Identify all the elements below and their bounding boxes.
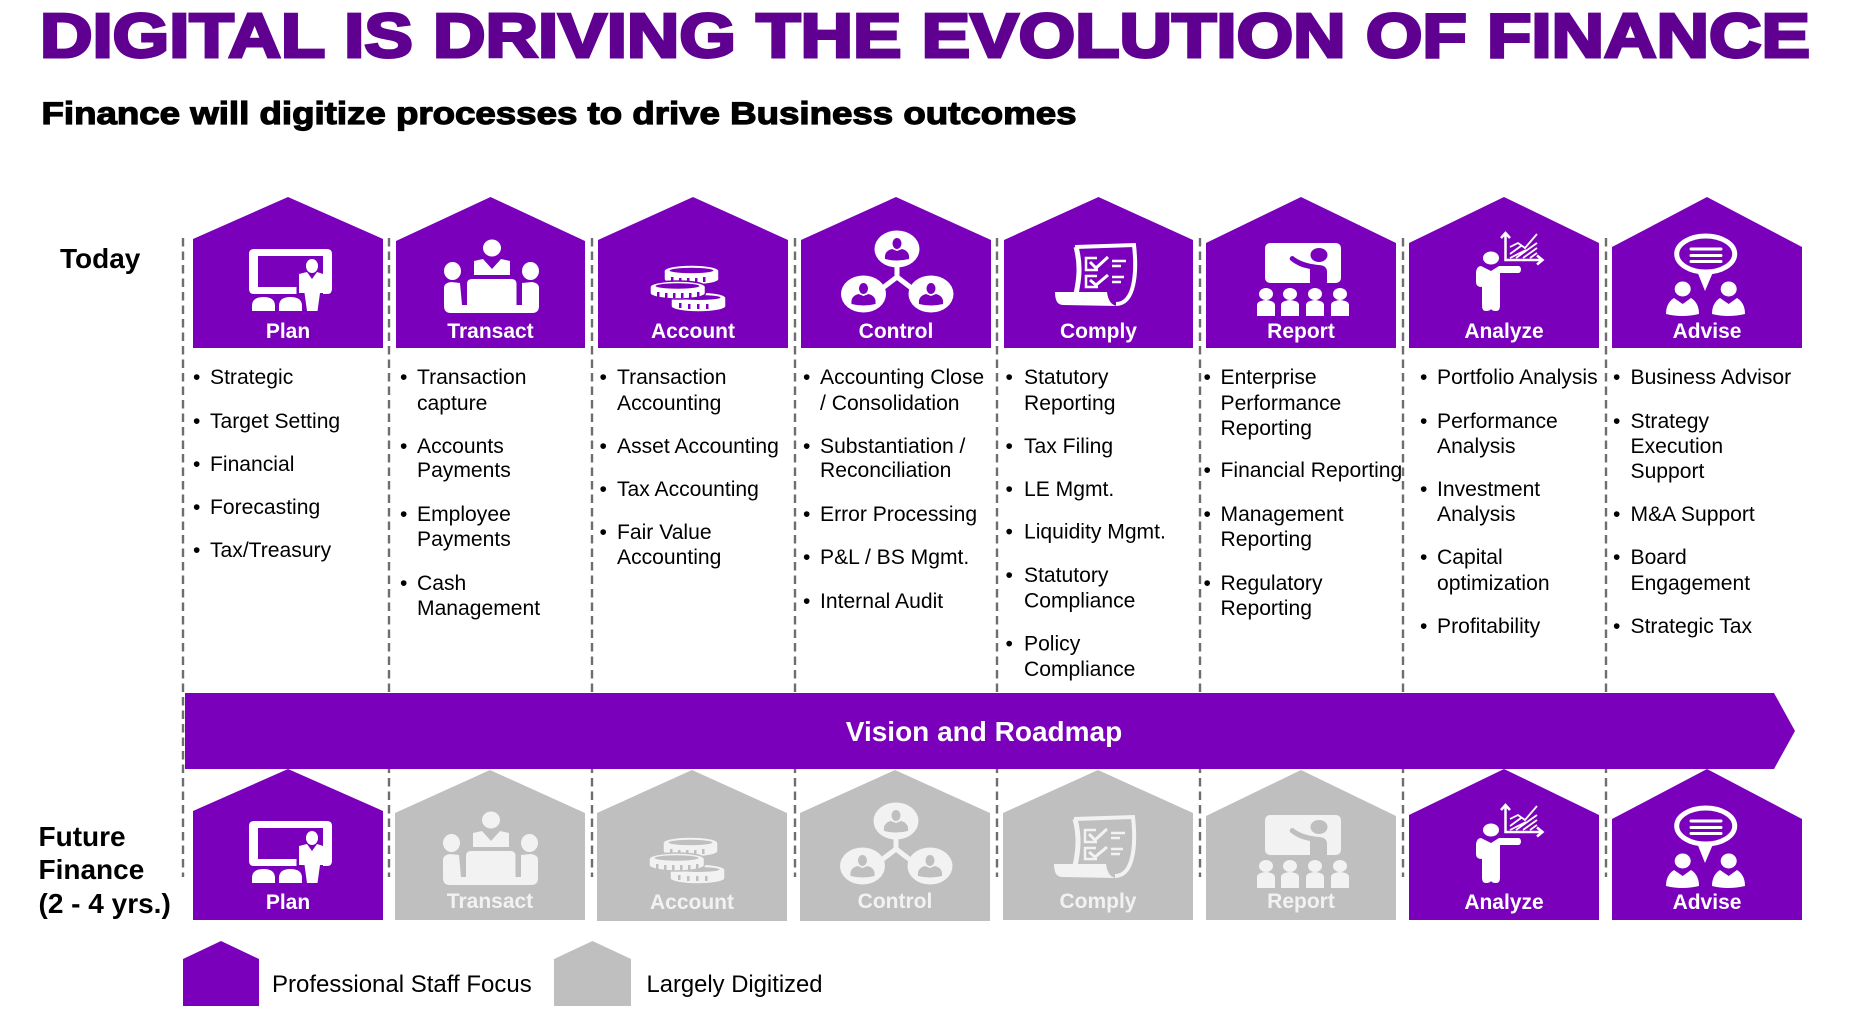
list: Comply: Statutory [1024,564,1109,587]
list: Advise: • [1613,546,1620,569]
list: Comply: • [1006,435,1013,458]
list: Comply: • [1006,564,1013,587]
list: Analyze: Analysis [1437,503,1516,526]
list: Transact: Transaction [417,366,526,389]
list: Account: Tax Accounting [617,478,759,501]
arrow banner: Vision and Roadmap: Vision and Roadmap [846,716,1122,747]
house: Report [1206,197,1396,348]
list: Advise: Strategy [1630,410,1710,433]
list: Analyze: • [1420,366,1427,389]
list: Report: Regulatory [1220,572,1323,595]
list: Control: • [803,435,810,458]
list: Report: Financial Reporting [1220,459,1402,482]
list: Control [803,366,984,613]
house: Account (digitized): Account [650,891,734,914]
list: Plan: • [193,366,200,389]
house: Advise (professional focus): Advise [1673,891,1741,914]
list: Report: • [1204,366,1211,389]
house: Advise: Advise [1673,320,1741,343]
list: Analyze: Profitability [1437,615,1541,638]
list: Comply: • [1006,632,1013,656]
list: Transact: • [400,435,407,458]
list: Analyze: • [1420,615,1427,638]
house: Comply (digitized) [1003,770,1193,920]
list: Comply: • [1006,478,1013,501]
house: Report: Report [1267,320,1335,343]
list: Transact: • [400,503,407,526]
house: Transact (digitized): Transact [447,890,533,913]
list: Advise: Support [1630,460,1705,483]
list: Plan: Strategic [210,366,293,389]
house: Account [598,197,788,348]
house: Comply: Comply [1060,320,1137,343]
house: Analyze (professional focus): Analyze [1464,891,1544,914]
list: Plan: Financial [210,453,294,476]
list: Report: Reporting [1220,417,1312,440]
house: Account: Account [651,320,735,343]
house: Analyze: Analyze [1464,320,1544,343]
list: Account: Asset Accounting [617,435,779,458]
list: Account: Accounting [617,392,721,415]
list: Control: • [803,503,810,526]
list: Transact [400,366,540,620]
list: Advise: Engagement [1630,572,1750,595]
house: Advise [1612,197,1802,348]
house: Control (digitized): Control [858,890,932,913]
list: Control: • [803,590,810,613]
list: Account: Fair Value [617,521,712,544]
house: Control [801,197,991,348]
list: Analyze: • [1420,478,1427,501]
list: Advise: • [1613,615,1620,638]
list: Account: • [600,366,607,389]
list: Account: Transaction [617,366,726,389]
list: Report: • [1204,572,1211,595]
list: Advise: Board [1630,546,1687,569]
list: Plan: • [193,539,200,562]
list: Transact: Payments [417,528,511,551]
list: Report [1204,366,1402,620]
list: Comply: Liquidity Mgmt. [1024,520,1166,544]
list: Account: • [600,435,607,458]
list: Plan: • [193,410,200,433]
list: Transact: Accounts [417,435,504,458]
list: Plan [193,366,340,562]
list: Analyze: Capital [1437,546,1503,569]
list: Control: / Consolidation [820,392,960,415]
list: Account: • [600,521,607,544]
list: Plan: Forecasting [210,496,320,519]
list: Advise: Execution [1630,435,1723,458]
list: Analyze: optimization [1437,572,1550,595]
list: Comply: Reporting [1024,392,1115,415]
list: Control: Error Processing [820,503,977,526]
row label: future finance: (2 - 4 yrs.) [38,888,171,919]
list: Analyze: Analysis [1437,435,1516,458]
house: Transact [396,197,585,348]
list: Analyze [1420,366,1598,638]
house: Report (digitized): Report [1267,890,1335,913]
house: Control (digitized) [800,770,990,921]
list: Control: Reconciliation [820,459,951,482]
list: Transact: Employee [417,503,511,526]
list: Plan: • [193,453,200,476]
list: Advise: M&A Support [1630,503,1755,526]
legend: professional staff focus [183,941,532,1006]
legend [183,941,822,1006]
list: Report: Management [1220,503,1344,526]
title: DIGITAL IS DRIVING THE EVOLUTION OF FINANCE [40,1,1810,71]
arrow banner: Vision and Roadmap [185,693,1795,769]
list: Analyze: Performance [1437,410,1558,433]
list: Comply: Compliance [1024,658,1135,681]
legend: professional staff focus: Professional Staff Focus [272,971,532,998]
list: Control: Internal Audit [820,590,943,613]
list: Plan: Target Setting [210,410,340,433]
house: Transact (digitized) [395,770,585,920]
list: Analyze: • [1420,546,1427,569]
row label: today: Today [60,243,141,274]
list: Report: Performance [1220,392,1341,415]
list: Report: Enterprise [1220,366,1317,389]
list: Account: • [600,478,607,501]
list: Transact: Management [417,597,540,620]
list: Comply: Tax Filing [1024,435,1113,458]
list: Account: Accounting [617,546,721,569]
list: Control: • [803,366,810,389]
list: Plan: Tax/Treasury [210,539,332,562]
house: Control: Control [859,320,933,343]
list: Advise: • [1613,503,1620,526]
dashed column dividers [183,238,1606,877]
list: Report: Reporting [1220,528,1312,551]
list: Control: Accounting Close [820,366,984,389]
list: Analyze: • [1420,410,1427,433]
list: Control: Substantiation / [820,435,966,458]
list: Analyze: Portfolio Analysis [1437,366,1598,389]
future row [193,769,1802,921]
list: Comply: • [1006,520,1013,544]
row label: future finance [38,821,171,919]
row label: future finance: Future [38,821,126,852]
list: Account [600,366,779,569]
list: Advise: • [1613,366,1620,389]
house: Plan (professional focus) [193,769,383,920]
list: Advise: Business Advisor [1630,366,1791,389]
list: Comply: Policy [1024,632,1081,656]
list: Report: • [1204,503,1211,526]
list: Transact: • [400,572,407,595]
list: Analyze: Investment [1437,478,1540,501]
row label: future finance: Finance [38,854,144,885]
list: Transact: Cash [417,572,466,595]
list: Comply: LE Mgmt. [1024,478,1114,501]
house: Advise (professional focus) [1612,769,1802,920]
house: Report (digitized) [1206,770,1396,920]
list: Report: • [1204,459,1211,482]
house: Account (digitized) [597,770,787,921]
legend: largely digitized [554,941,822,1006]
list: Comply [1006,366,1166,681]
house: Plan [193,197,383,348]
subtitle: Finance will digitize processes to drive Business outcomes [42,95,1076,131]
today row [193,197,1802,348]
list: Advise: Strategic Tax [1630,615,1752,638]
house: Analyze (professional focus) [1409,769,1599,920]
list: Advise: • [1613,410,1620,433]
house: Plan: Plan [266,320,310,343]
list: Plan: • [193,496,200,519]
house: Analyze [1409,197,1599,348]
list: Transact: capture [417,392,487,415]
list: Control: P&L / BS Mgmt. [820,546,969,569]
house: Comply (digitized): Comply [1059,890,1137,913]
legend: largely digitized: Largely Digitized [646,971,822,998]
list: Advise [1613,366,1791,638]
list: Control: • [803,546,810,569]
list: Comply: • [1006,366,1013,389]
list: Transact: Payments [417,459,511,482]
list: Comply: Compliance [1024,590,1135,612]
list: Report: Reporting [1220,597,1312,620]
list: Comply: Statutory [1024,366,1109,389]
house: Comply [1004,197,1193,348]
house: Transact: Transact [447,320,534,343]
house: Plan (professional focus): Plan [266,891,310,914]
list: Transact: • [400,366,407,389]
